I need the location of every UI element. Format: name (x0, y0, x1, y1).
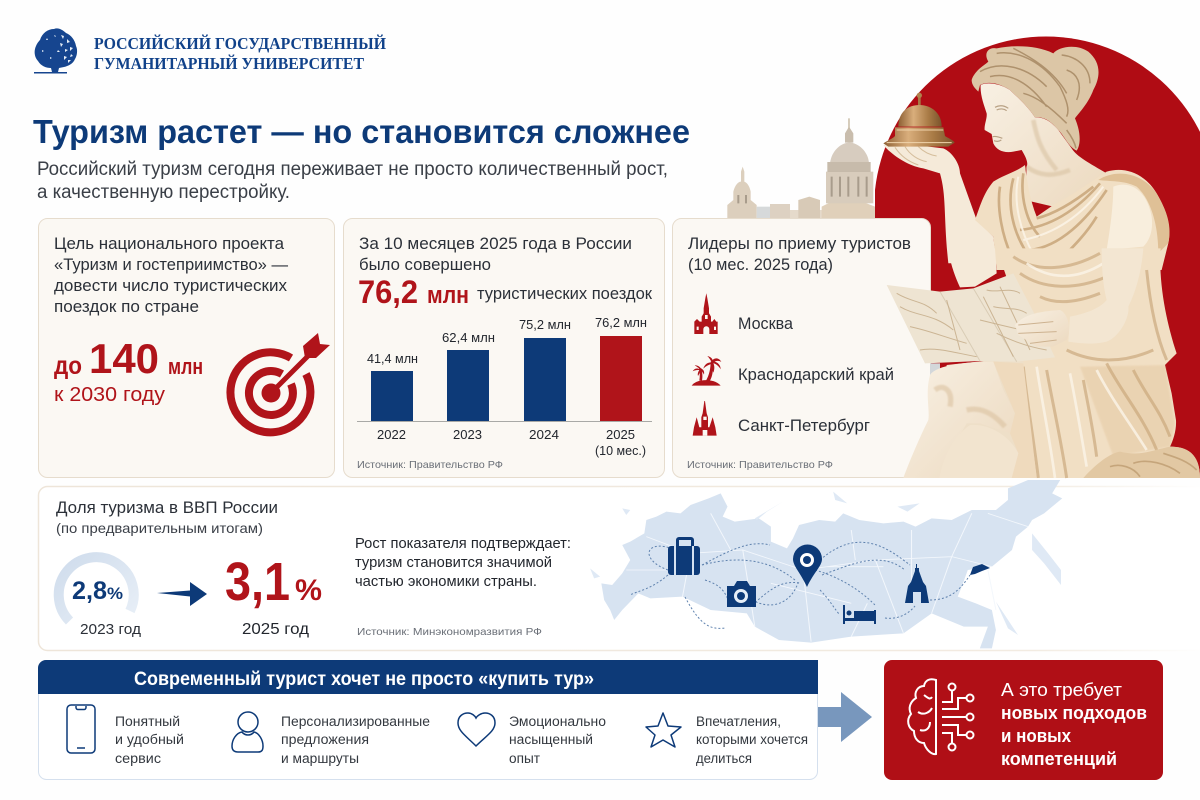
goal figure: 140 (89, 335, 159, 382)
bar chart: 41,4 млн (367, 352, 418, 366)
gauge 2023: % (107, 584, 123, 603)
bar chart: 2022 (377, 428, 406, 442)
item: shareable impressions: делиться (696, 751, 752, 766)
subtitle: а качественную перестройку. (37, 182, 290, 203)
goal figure: млн (168, 354, 203, 379)
statue: dress top (975, 165, 1169, 270)
trips heading: За 10 месяцев 2025 года в России (359, 235, 632, 253)
statue: leg backing (939, 357, 1023, 478)
St Petersburg label: Санкт-Петербург (738, 417, 870, 435)
icon: target with arrow (230, 333, 330, 432)
figure 2025: 2025 год (242, 621, 309, 638)
goal text: довести число туристических (54, 277, 288, 295)
statue: head and neck (981, 83, 1107, 207)
item: personal offers: предложения (281, 732, 369, 747)
item: personal offers: Персонализированные (281, 714, 430, 729)
figure 2025: 3,1 (225, 552, 290, 612)
source note: Источник: Правительство РФ (687, 459, 833, 471)
gauge 2023 (59, 557, 141, 638)
figure 2025: % (295, 574, 322, 607)
bar chart (357, 316, 652, 458)
Moscow label: Москва (738, 315, 794, 333)
statue: hair (972, 46, 1099, 151)
statue: lower body (887, 248, 1200, 478)
icon: smartphone (67, 705, 95, 753)
GDP subheading: (по предварительным итогам) (56, 520, 263, 536)
icon: service bell (883, 93, 955, 147)
statue: fold highlights (1016, 177, 1103, 260)
icon: Moscow kremlin (694, 293, 718, 334)
statue: tourist map (887, 273, 1055, 363)
trips heading (359, 235, 632, 274)
goal text: поездок по стране (54, 298, 199, 316)
icon: star (646, 713, 681, 747)
statue: hair strands (980, 48, 1090, 148)
map islands (590, 492, 1061, 635)
statue: hem folds (1083, 447, 1200, 478)
Krasnodar label: Краснодарский край (738, 366, 894, 384)
statue: skirt front edge (993, 362, 1037, 478)
gauge 2023: 2,8 (72, 577, 107, 605)
statue: face shading (1027, 120, 1070, 175)
panel: trips chart (344, 218, 664, 478)
item: convenient service: и удобный (115, 732, 184, 747)
university name (94, 34, 386, 73)
statue: knee and leg (903, 362, 1015, 478)
item: emotional experience: насыщенный (509, 732, 593, 747)
subtitle: Российский туризм сегодня переживает не просто количественный рост, (37, 159, 668, 180)
map of Russia (590, 480, 1062, 648)
trips heading: было совершено (359, 256, 491, 274)
item: shareable impressions: которыми хочется (696, 732, 808, 747)
item: convenient service: Понятный (115, 714, 180, 729)
statue: skirt folds (995, 253, 1170, 478)
map landmass (601, 480, 1062, 648)
item: emotional experience: опыт (509, 751, 540, 766)
subtitle (37, 159, 668, 203)
university logo (34, 28, 386, 74)
statue: hand holding map (1015, 310, 1069, 347)
statue: hand fingers (1018, 322, 1057, 343)
icon: palm island (692, 356, 721, 386)
conclusion text: и новых (1001, 726, 1071, 746)
statue: fingers (895, 147, 937, 165)
icon: suitcase (668, 537, 700, 575)
goal text (54, 235, 288, 316)
leaders heading: Лидеры по приему туристов (688, 235, 911, 253)
conclusion text: А это требует (1001, 680, 1122, 700)
GDP heading: Доля туризма в ВВП России (56, 499, 278, 517)
icon: bed (843, 605, 876, 624)
source note: Источник: Минэкономразвития РФ (357, 626, 542, 638)
icon: location pin (793, 544, 822, 587)
icon: person (232, 712, 263, 752)
statue: seat (930, 363, 940, 377)
statue: bare forearm holding map (1068, 248, 1143, 344)
item: convenient service (115, 714, 184, 766)
item: shareable impressions: Впечатления, (696, 714, 781, 729)
statue: hem details (1110, 453, 1197, 477)
conclusion text (1001, 680, 1147, 769)
statue: skirt highlights (1027, 263, 1147, 478)
bar chart: 2025 (606, 428, 635, 442)
title: Туризм растет — но становится сложнее (33, 114, 690, 151)
goal figure: к 2030 году (54, 384, 165, 406)
conclusion text: новых подходов (1001, 703, 1147, 723)
bar chart: 75,2 млн (519, 318, 571, 332)
conclusion text: компетенций (1001, 749, 1117, 769)
item: emotional experience: Эмоционально (509, 714, 606, 729)
statue: cloak band (1098, 174, 1170, 253)
statue: lower leg (939, 425, 1018, 478)
header text: Современный турист хочет не просто «купить тур» (134, 669, 594, 690)
statue with bell and map (883, 46, 1200, 478)
trips figure (358, 274, 653, 310)
arrow: growth (157, 582, 207, 606)
bar chart: 76,2 млн (595, 316, 647, 330)
bar chart: 2024 (529, 428, 559, 442)
item: shareable impressions (696, 714, 808, 766)
growth explanation: частью экономики страны. (355, 574, 537, 590)
map dashed routes (630, 542, 970, 628)
statue: top folds (999, 173, 1107, 260)
university name: ГУМАНИТАРНЫЙ УНИВЕРСИТЕТ (94, 54, 365, 73)
goal text: «Туризм и гостеприимство» — (54, 256, 288, 274)
skyline: cathedral silhouette (727, 118, 875, 220)
statue: upper body (883, 46, 1170, 270)
statue: skirt and torso (993, 248, 1200, 478)
panel: conclusion (884, 660, 1163, 780)
figure 2025 (225, 552, 322, 638)
statue: skirt shade (1080, 365, 1175, 457)
panel: leading destinations (672, 218, 930, 478)
item: personal offers: и маршруты (281, 751, 359, 766)
source note: Источник: Правительство РФ (357, 459, 503, 471)
panel: national project goal (38, 218, 334, 478)
leaders heading: (10 мес. 2025 года) (688, 256, 833, 274)
panel: GDP share (38, 480, 1200, 650)
growth explanation: туризм становится значимой (355, 555, 552, 571)
panel header (38, 660, 818, 694)
growth explanation (355, 536, 571, 590)
item: emotional experience (509, 714, 606, 766)
icon: St Petersburg tower (693, 401, 717, 436)
goal figure (54, 335, 203, 406)
statue: face features (993, 106, 1008, 141)
item: personal offers (281, 714, 430, 766)
goal text: Цель национального проекта (54, 235, 285, 253)
trips figure: млн (427, 282, 469, 309)
statue: raised arm and hand (883, 145, 997, 263)
trips figure: 76,2 (358, 274, 418, 310)
university name: РОССИЙСКИЙ ГОСУДАРСТВЕННЫЙ (94, 34, 386, 53)
icon: heart (458, 713, 495, 746)
arrow: to conclusion (818, 692, 872, 742)
icon: dark peninsula (970, 564, 990, 575)
icon: oak tree emblem (34, 28, 77, 74)
icon: brain circuit (908, 679, 974, 754)
growth explanation: Рост показателя подтверждает: (355, 536, 571, 552)
item: convenient service: сервис (115, 751, 161, 766)
statue: shoulder cloth (1107, 185, 1152, 250)
red arch background (875, 37, 1200, 478)
panel: modern tourist (38, 660, 818, 780)
gauge 2023: 2023 год (80, 621, 141, 638)
statue: leg shading (935, 387, 1005, 427)
map region lines (626, 513, 1028, 642)
trips figure: туристических поездок (477, 285, 653, 303)
goal figure: до (54, 352, 82, 380)
leaders heading (688, 235, 911, 274)
icon: church (905, 564, 929, 603)
icon: camera (727, 581, 756, 607)
statue: other forearm (948, 248, 997, 287)
bar chart: 62,4 млн (442, 331, 495, 345)
bar chart: (10 мес.) (595, 444, 646, 458)
bar chart: 2023 (453, 428, 482, 442)
